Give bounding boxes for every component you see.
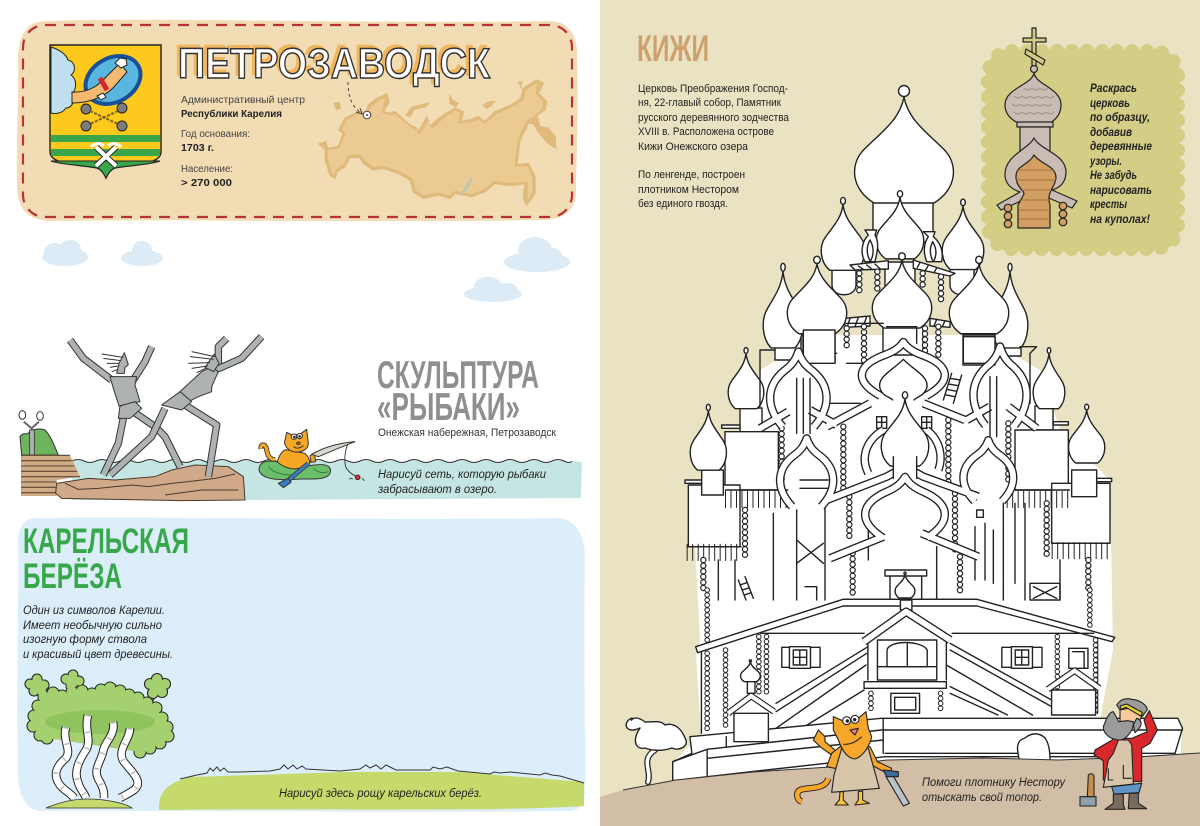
birch description [23,605,173,661]
colouring task: церковь [1090,96,1130,110]
central dome [881,392,929,480]
colouring task: по образцу, [1090,110,1150,124]
carpenter task [922,777,1066,804]
birch description: и красивый цвет древесины. [23,649,173,661]
church silhouette [673,335,1182,782]
sculpture figures [70,337,262,477]
domes [821,86,984,302]
city facts: Административный центр [181,94,305,106]
sample dome [997,28,1077,228]
clouds [42,237,570,302]
left page background [0,0,600,826]
city facts: 1703 г. [181,142,214,154]
log columns [703,327,1088,593]
colouring task: добавив [1090,125,1132,139]
lower church [673,590,1182,781]
vertical posts [718,323,1060,600]
white tree and bush [626,718,1050,782]
city facts: > 270 000 [181,177,232,189]
illustration: Kizhi church [626,86,1182,782]
colouring task: кресты [1090,197,1128,211]
colouring task: деревянные [1090,139,1152,153]
colouring task: на куполах! [1090,212,1150,226]
carpenter Nestor [1080,699,1157,809]
illustration: sculpture Fishermen [19,337,582,501]
city facts: Год основания: [181,128,250,140]
walls [701,637,1098,737]
frieze skirts [687,490,1110,552]
heading: Karelian birch: БЕРЁЗА [23,557,122,596]
map of Russia [319,80,556,205]
Kizhi description: русского деревянного зодчества [638,112,789,124]
sculpture task [377,469,547,496]
ground [159,765,584,810]
bush and lamp [19,411,58,455]
crown fill hiding inner outlines [26,671,173,757]
Kizhi description [638,83,789,210]
cat carpenter with saw [797,712,909,806]
city facts: Население: [181,163,233,175]
heading: Karelian birch [23,522,189,596]
coat of arms [50,45,161,178]
Kizhi description: плотником Нестором [638,184,739,196]
stairs [776,643,1052,730]
city facts: Республики Карелия [181,108,282,120]
Kizhi description: Кижи Онежского озера [638,141,748,153]
towers [685,404,1112,547]
Kizhi description: По ленгенде, построен [638,169,745,181]
kokoshnik arches [803,330,995,363]
birch description: Один из символов Карелии. [23,605,165,617]
colouring task: Раскрась [1090,81,1137,95]
carpenter task: Помоги плотнику Нестору [922,777,1066,789]
small decorative dome on gable [895,572,915,598]
location marker with dashed arrow [348,82,371,119]
heading: sculpture [377,354,539,429]
heading: sculpture: «РЫБАКИ» [377,386,520,429]
city title: ПЕТРОЗАВОДСК [178,40,491,88]
city facts [181,94,305,189]
Kizhi description: Церковь Преображения Господ- [638,83,788,95]
colouring task [1089,81,1152,226]
rock [56,465,245,501]
main roof [696,599,1115,653]
birch description: Имеет необычную сильно [23,620,163,632]
small windows [805,417,983,600]
sculpture location: Онежская набережная, Петрозаводск [378,427,556,439]
birch task: Нарисуй здесь рощу карельских берёз. [279,788,482,800]
stone steps [21,455,80,496]
Kizhi description: XVIII в. Расположена острове [638,126,774,138]
sculpture task: забрасывают в озеро. [377,484,497,496]
base platform [673,718,1182,781]
birch tree [25,670,174,808]
bracing [797,540,1060,600]
heading: Karelian birch: КАРЕЛЬСКАЯ [23,522,189,561]
cat in rubber boat [259,429,364,488]
porch [864,600,946,713]
Kizhi description: ня, 22-главый собор, Памятник [638,97,781,109]
middle tiers, walls and kokoshniks [685,323,1112,600]
birch description: изогную форму ствола [23,634,147,646]
lower log columns [678,590,1173,780]
sculpture task: Нарисуй сеть, которую рыбаки [378,469,547,481]
small flames and hatched beams [845,230,955,327]
colouring task: нарисовать [1090,183,1152,197]
side chapels [734,660,1096,742]
water [72,460,582,500]
stitched border [23,25,572,217]
carpenter task: отыскать свой топор. [922,792,1042,804]
ground [600,753,1200,826]
heading: Kizhi: КИЖИ [637,28,709,69]
panel: colouring sample [986,28,1180,251]
Kizhi description: без единого гвоздя. [638,198,728,210]
panel: Karelian birch [17,518,585,812]
colouring task: Не забудь [1090,168,1137,182]
ladders [738,373,962,600]
right page background [600,0,1200,826]
heading: sculpture: СКУЛЬПТУРА [377,354,539,397]
upper domes [728,253,1065,438]
panel: Petrozavodsk [17,20,578,221]
shuttered windows [782,647,1088,668]
colouring task: узоры. [1089,154,1122,168]
